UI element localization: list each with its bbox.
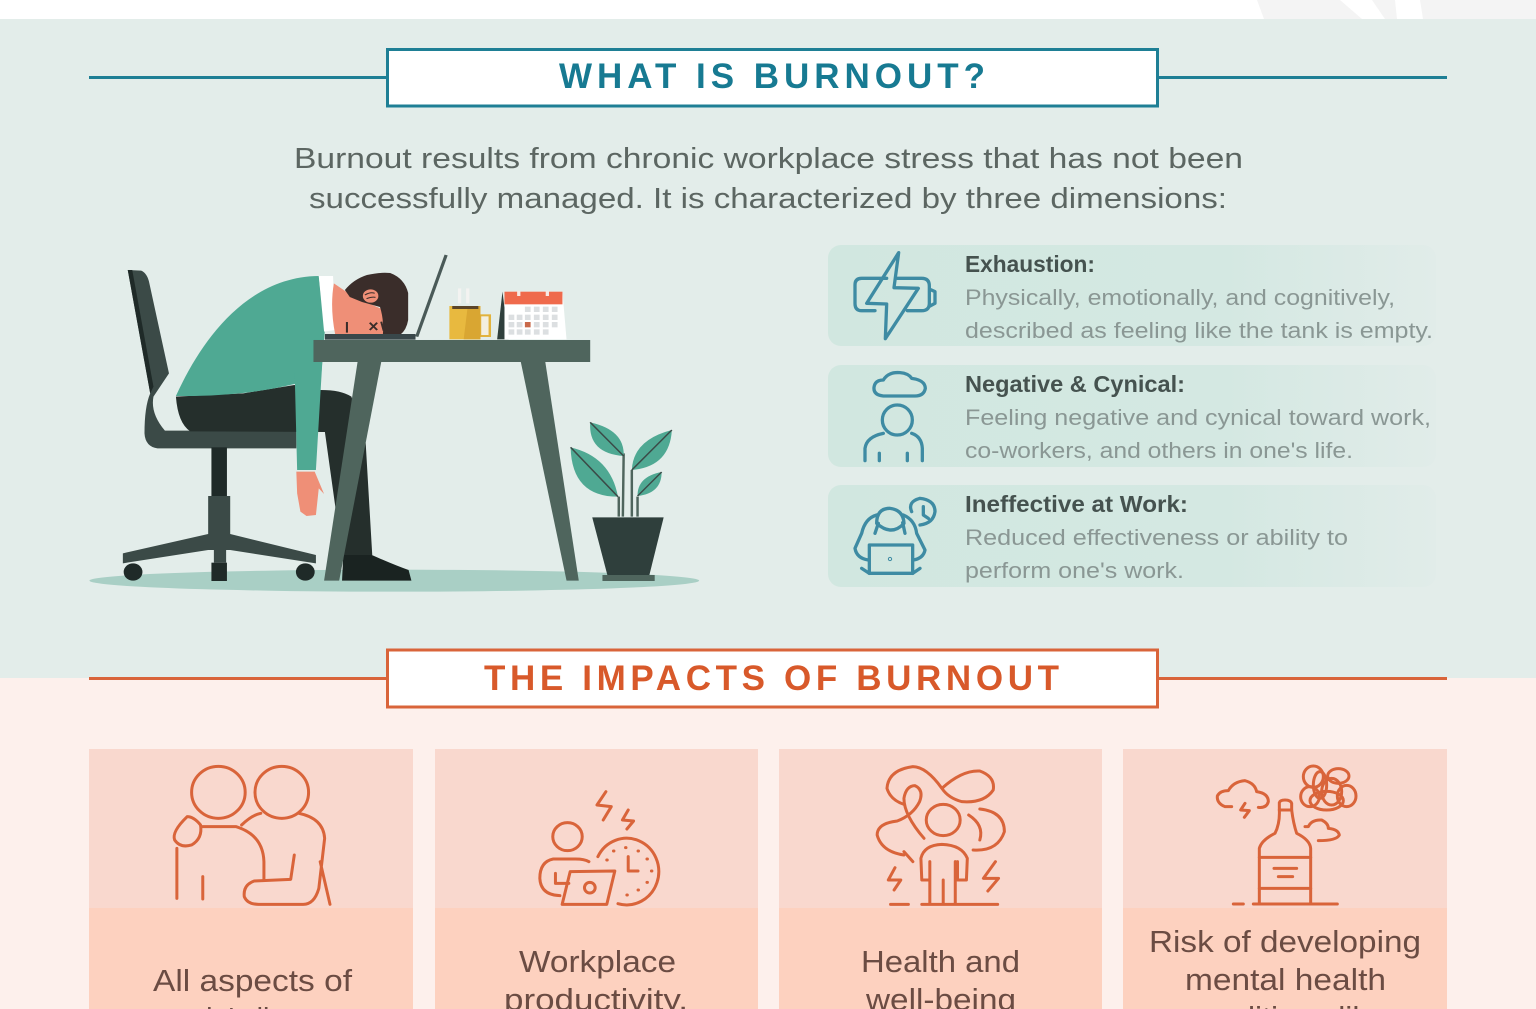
text: exhaustion: Physically, emotionally, and cognitively, bbox=[965, 285, 1395, 310]
text: negative and cynical: co-workers, and others in one's life. bbox=[965, 438, 1353, 463]
icon: person in tangled lines bbox=[877, 767, 1004, 904]
text: ineffective at work: perform one's work. bbox=[965, 558, 1184, 583]
text: ineffective at work: Ineffective at Work: bbox=[965, 491, 1188, 517]
panel: what is burnout bbox=[0, 19, 1536, 678]
icon: bottle with clouds and tangle bbox=[1217, 766, 1356, 904]
panel: ineffective at work bbox=[828, 485, 1436, 587]
heading: the impacts of burnout: THE IMPACTS OF BURNOUT bbox=[484, 659, 1059, 698]
text: negative and cynical: Feeling negative and cynical toward work, bbox=[965, 405, 1431, 430]
text: negative and cynical: Negative & Cynical: bbox=[965, 371, 1185, 397]
heading: the impacts of burnout bbox=[388, 650, 1158, 707]
card: health and well-being bbox=[779, 749, 1102, 1009]
card text bbox=[861, 944, 1020, 1009]
heading: what is burnout bbox=[388, 50, 1158, 106]
text: ineffective at work: Reduced effectiveness or ability to bbox=[965, 525, 1348, 550]
card text: Workplace bbox=[519, 944, 676, 979]
icon: two people with arm around shoulder bbox=[174, 766, 330, 904]
icon: battery with lightning bolt bbox=[855, 253, 935, 339]
card text: Health and bbox=[861, 944, 1020, 979]
intro text bbox=[294, 143, 1243, 215]
icon: stressed person at laptop with clock bbox=[855, 498, 935, 573]
text: negative and cynical bbox=[965, 371, 1431, 463]
text: exhaustion: described as feeling like the tank is empty. bbox=[965, 318, 1433, 343]
icon: person under a cloud bbox=[865, 373, 925, 461]
card: productivity bbox=[435, 749, 758, 1009]
illustration: exhausted man at desk bbox=[89, 255, 699, 592]
icon: worker with laptop and clock bbox=[540, 792, 659, 905]
card: mental health risk bbox=[1123, 749, 1447, 1009]
card text bbox=[504, 944, 688, 1009]
panel: negative and cynical bbox=[828, 365, 1436, 467]
card text: All aspects of bbox=[153, 963, 352, 998]
text: exhaustion: Exhaustion: bbox=[965, 251, 1095, 277]
panel: exhaustion bbox=[828, 245, 1436, 346]
intro text: Burnout results from chronic workplace stress that has not been bbox=[294, 143, 1243, 175]
heading: what is burnout: WHAT IS BURNOUT? bbox=[559, 57, 985, 96]
panel: impacts of burnout bbox=[0, 650, 1536, 1009]
card: relationships bbox=[89, 749, 413, 1009]
card text: mental health bbox=[1185, 962, 1386, 997]
intro text: successfully managed. It is characterized by three dimensions: bbox=[309, 183, 1227, 215]
card text bbox=[142, 963, 364, 1009]
text: exhaustion bbox=[965, 251, 1433, 343]
text: ineffective at work bbox=[965, 491, 1348, 583]
card text bbox=[1149, 924, 1421, 1009]
card text: Risk of developing bbox=[1149, 924, 1421, 959]
